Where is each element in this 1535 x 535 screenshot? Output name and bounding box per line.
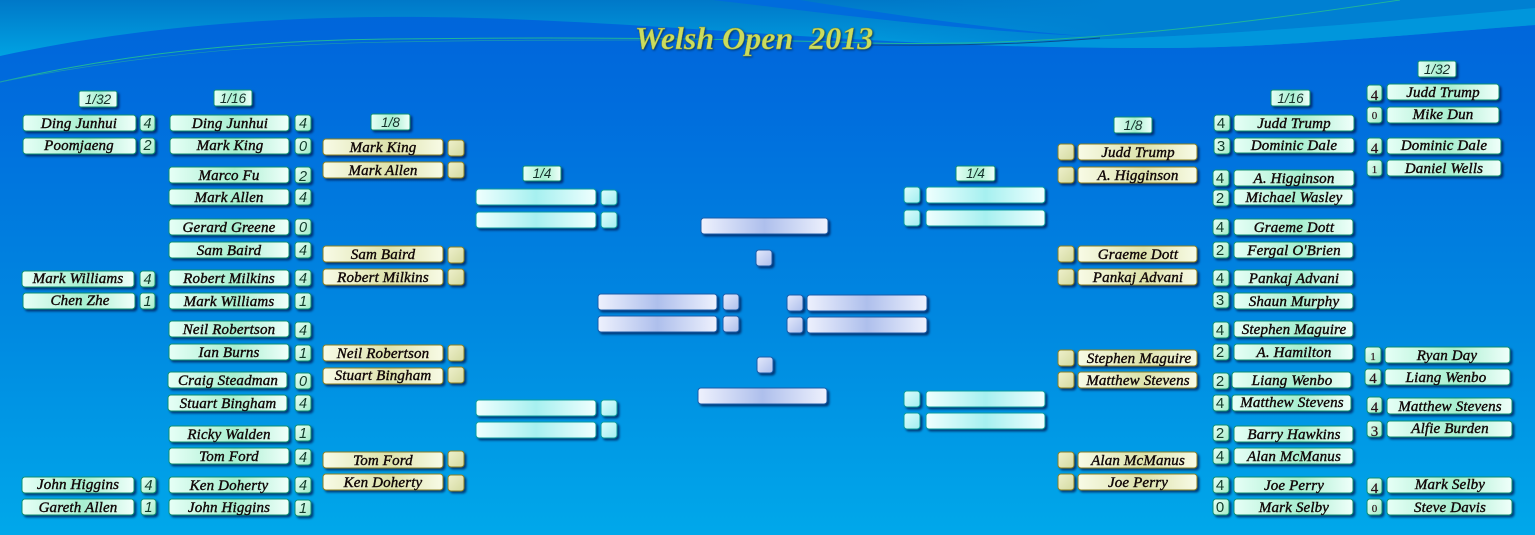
player: Matthew Stevens: 4	[1216, 395, 1224, 412]
player: Liang Wenbo	[1365, 369, 1510, 387]
round label 1/4: 1/4	[533, 166, 551, 181]
player: Matthew Stevens	[1367, 397, 1512, 416]
player: A. Hamilton	[1213, 344, 1353, 361]
round: right 1/4	[904, 166, 1045, 429]
player: Daniel Wells: Daniel Wells	[1404, 161, 1483, 177]
player: Fergal O'Brien: Fergal O'Brien	[1246, 243, 1341, 259]
player: Ian Burns: 1	[299, 346, 307, 362]
player: Shaun Murphy	[1213, 292, 1353, 310]
player: John Higgins: John Higgins	[188, 500, 270, 516]
player: Poomjaeng: 2	[142, 138, 152, 154]
round label 1/4	[523, 166, 561, 181]
player: Marco Fu: 2	[298, 169, 307, 185]
player: Steve Davis: Steve Davis	[1414, 500, 1486, 516]
player: John Higgins: 1	[299, 501, 307, 517]
player: Pankaj Advani	[1058, 269, 1197, 286]
player: Stephen Maguire	[1213, 321, 1353, 339]
player: Neil Robertson	[169, 321, 311, 339]
player: Gareth Allen: 1	[144, 500, 153, 516]
round label 1/32	[79, 91, 117, 107]
player: Ian Burns	[169, 344, 311, 362]
player: Graeme Dott: 4	[1216, 219, 1224, 236]
player: Mark King: Mark King	[349, 140, 417, 156]
player: Robert Milkins: Robert Milkins	[336, 270, 429, 286]
player: Judd Trump	[1214, 115, 1354, 132]
player: Robert Milkins	[169, 270, 311, 287]
player: Mark Allen	[323, 162, 464, 179]
player: Judd Trump: Judd Trump	[1101, 145, 1175, 161]
player: Steve Davis	[1367, 499, 1512, 516]
player: Daniel Wells: 1	[1372, 164, 1377, 176]
player: Sam Baird: 4	[299, 243, 307, 259]
round: right 1/16	[1213, 90, 1354, 516]
player: Barry Hawkins: 2	[1216, 425, 1224, 442]
centre: finals	[598, 218, 927, 404]
player: Mark Williams: 4	[143, 272, 152, 288]
player: Craig Steadman: 0	[299, 374, 307, 390]
player: Mark Allen	[169, 189, 311, 206]
player: Neil Robertson: Neil Robertson	[182, 322, 275, 338]
player: Steve Davis: 0	[1372, 503, 1378, 515]
player: Graeme Dott	[1213, 219, 1353, 236]
player: Ding Junhui: 4	[299, 116, 307, 132]
player: Joe Perry: Joe Perry	[1108, 475, 1168, 491]
empty slot	[904, 391, 1045, 407]
player: Judd Trump: Judd Trump	[1406, 85, 1480, 101]
round label 1/16: 1/16	[1277, 91, 1304, 106]
round: left 1/16	[168, 90, 311, 517]
player: Stuart Bingham	[168, 395, 311, 412]
player: Judd Trump: 4	[1371, 88, 1379, 104]
player: Stephen Maguire: Stephen Maguire	[1087, 351, 1191, 367]
player: Sam Baird	[323, 246, 464, 263]
round label 1/4: 1/4	[966, 166, 985, 181]
player: Ryan Day: Ryan Day	[1416, 348, 1477, 364]
player: Michael Wasley: 2	[1216, 190, 1224, 207]
player: Mark King: 0	[299, 139, 307, 155]
player: Gerard Greene	[169, 219, 311, 236]
player: Ricky Walden: Ricky Walden	[186, 427, 271, 443]
player: Pankaj Advani: Pankaj Advani	[1248, 271, 1339, 287]
player: Joe Perry: 4	[1216, 477, 1224, 494]
player: Mike Dun: 0	[1372, 110, 1378, 122]
player: Mark Selby: Mark Selby	[1414, 477, 1485, 493]
player: Stuart Bingham: Stuart Bingham	[180, 396, 276, 412]
player: John Higgins	[22, 477, 156, 494]
player: Dominic Dale	[1367, 138, 1501, 157]
player: Stuart Bingham	[323, 367, 464, 384]
player: Craig Steadman	[168, 372, 311, 390]
player: Judd Trump: Judd Trump	[1257, 116, 1331, 132]
player: Joe Perry: Joe Perry	[1264, 478, 1324, 494]
player: Shaun Murphy: 3	[1216, 292, 1224, 309]
player: Ding Junhui: 4	[143, 116, 152, 132]
round label 1/8: 1/8	[1124, 118, 1143, 133]
player: Dominic Dale	[1214, 138, 1354, 155]
player: Chen Zhe	[23, 293, 155, 310]
player: A. Higginson: 4	[1216, 170, 1224, 187]
player: Matthew Stevens: 4	[1371, 400, 1379, 416]
player: Craig Steadman: Craig Steadman	[178, 373, 278, 389]
player: John Higgins: John Higgins	[37, 477, 119, 493]
player: Alfie Burden	[1367, 421, 1512, 440]
player: Alfie Burden: Alfie Burden	[1410, 421, 1489, 437]
player: A. Higginson: A. Higginson	[1253, 171, 1334, 187]
player: Mark Allen: Mark Allen	[193, 190, 264, 206]
player: Ken Doherty: 4	[299, 478, 307, 494]
player: Mark King	[323, 139, 464, 156]
player: Poomjaeng: Poomjaeng	[43, 138, 114, 154]
player: John Higgins	[169, 499, 311, 517]
player: Neil Robertson: 4	[299, 323, 307, 339]
player: Ding Junhui: Ding Junhui	[191, 116, 268, 132]
player: Ding Junhui	[23, 115, 155, 132]
player: Ding Junhui	[170, 115, 311, 132]
round label 1/16	[1271, 90, 1310, 106]
player: Judd Trump	[1058, 144, 1197, 161]
player: Mark Williams	[169, 293, 311, 310]
player: Robert Milkins	[323, 269, 464, 286]
player: Chen Zhe: 1	[143, 294, 152, 310]
player: Ricky Walden	[169, 425, 311, 443]
final slot bottom	[698, 357, 827, 404]
final slot top	[701, 218, 828, 266]
player: Mark Selby	[1367, 477, 1512, 497]
empty slot	[476, 189, 617, 205]
player: Liang Wenbo: 4	[1369, 371, 1377, 387]
player: Mark King: Mark King	[196, 138, 264, 154]
empty slot	[476, 212, 617, 228]
round label 1/4	[956, 166, 995, 181]
player: Ken Doherty: Ken Doherty	[343, 475, 423, 491]
player: Robert Milkins: 4	[299, 271, 307, 287]
player: Judd Trump	[1367, 84, 1499, 104]
player: Graeme Dott	[1058, 246, 1197, 263]
player: Mike Dun	[1367, 107, 1499, 123]
player: Dominic Dale: Dominic Dale	[1250, 138, 1337, 154]
round label 1/32	[1418, 61, 1456, 77]
player: Robert Milkins: Robert Milkins	[182, 271, 275, 287]
round label 1/8: 1/8	[381, 115, 400, 130]
player: Alan McManus	[1213, 448, 1353, 465]
empty slot	[904, 210, 1045, 226]
player: Gerard Greene: Gerard Greene	[183, 220, 276, 236]
player: Ken Doherty	[323, 474, 464, 491]
round label 1/32: 1/32	[85, 92, 112, 107]
player: Alan McManus: 4	[1216, 448, 1224, 465]
player: Ken Doherty: Ken Doherty	[189, 478, 269, 494]
semi-final left slot	[598, 294, 739, 310]
player: Matthew Stevens: Matthew Stevens	[1085, 373, 1190, 389]
player: Ian Burns: Ian Burns	[198, 345, 259, 361]
player: A. Higginson	[1058, 167, 1197, 184]
player: Alfie Burden: 3	[1371, 424, 1378, 440]
title: Welsh Open 2013	[635, 20, 873, 56]
player: Chen Zhe: Chen Zhe	[50, 293, 110, 309]
player: Neil Robertson	[323, 345, 464, 362]
player: Ryan Day: 1	[1370, 351, 1376, 363]
player: Alan McManus: Alan McManus	[1246, 449, 1341, 465]
player: Dominic Dale: Dominic Dale	[1400, 138, 1487, 154]
player: Pankaj Advani	[1213, 270, 1353, 287]
player: Pankaj Advani: 4	[1216, 270, 1224, 287]
player: Fergal O'Brien	[1213, 242, 1353, 259]
player: Mark Selby: Mark Selby	[1258, 500, 1329, 516]
player: Barry Hawkins: Barry Hawkins	[1247, 427, 1341, 443]
player: Stuart Bingham: Stuart Bingham	[335, 368, 431, 384]
round label 1/16	[214, 90, 252, 106]
player: Gareth Allen: Gareth Allen	[39, 500, 117, 516]
player: Alan McManus	[1058, 452, 1197, 469]
player: Michael Wasley: Michael Wasley	[1245, 190, 1343, 206]
player: Poomjaeng	[23, 138, 155, 154]
round: left 1/4	[476, 166, 617, 438]
round: left 1/32	[22, 91, 156, 516]
player: Tom Ford	[169, 448, 311, 466]
player: Graeme Dott: Graeme Dott	[1254, 220, 1335, 236]
player: Shaun Murphy: Shaun Murphy	[1249, 294, 1339, 310]
round label 1/8	[371, 114, 410, 130]
player: Graeme Dott: Graeme Dott	[1098, 247, 1179, 263]
player: Tom Ford	[323, 451, 464, 469]
semi-final right slot	[787, 295, 927, 311]
player: A. Higginson	[1213, 170, 1354, 187]
player: Stuart Bingham: 4	[299, 396, 307, 412]
semi-final left slot	[598, 316, 739, 332]
player: Mark Selby	[1213, 499, 1353, 516]
player: Joe Perry	[1213, 477, 1353, 494]
player: Mike Dun: Mike Dun	[1412, 107, 1473, 123]
player: Marco Fu	[169, 167, 311, 185]
round: left 1/8	[323, 114, 464, 491]
round: right 1/32	[1365, 61, 1512, 516]
player: Matthew Stevens: Matthew Stevens	[1239, 395, 1344, 411]
player: Gareth Allen	[22, 499, 156, 516]
player: A. Hamilton: A. Hamilton	[1256, 345, 1331, 361]
empty slot	[904, 413, 1045, 429]
round label 1/8	[1114, 117, 1152, 133]
player: Daniel Wells	[1367, 160, 1501, 177]
player: Judd Trump: 4	[1217, 115, 1225, 132]
empty slot	[476, 422, 617, 438]
player: Pankaj Advani: Pankaj Advani	[1092, 270, 1183, 286]
player: Alan McManus: Alan McManus	[1090, 453, 1185, 469]
player: Mark Selby: 0	[1216, 499, 1224, 516]
empty slot	[904, 187, 1045, 203]
round label 1/32: 1/32	[1424, 62, 1451, 77]
player: Fergal O'Brien: 2	[1216, 242, 1224, 259]
player: Stephen Maguire: 4	[1216, 322, 1224, 339]
semi-final right slot	[787, 317, 927, 333]
player: Ryan Day	[1365, 347, 1510, 364]
player: Tom Ford: Tom Ford	[353, 453, 413, 469]
player: Tom Ford: Tom Ford	[199, 449, 259, 465]
player: Neil Robertson: Neil Robertson	[336, 346, 429, 362]
player: Mark Allen: Mark Allen	[347, 163, 418, 179]
round label 1/16: 1/16	[220, 91, 247, 106]
player: Mark Williams: Mark Williams	[183, 294, 274, 310]
player: Dominic Dale: 3	[1217, 138, 1225, 155]
player: Sam Baird: Sam Baird	[351, 247, 416, 263]
player: Marco Fu: Marco Fu	[197, 168, 260, 184]
player: Michael Wasley	[1213, 189, 1353, 207]
player: Mark Williams	[22, 271, 155, 288]
player: Mark King	[170, 138, 311, 155]
player: Gerard Greene: 0	[299, 220, 307, 236]
round: right 1/8	[1058, 117, 1197, 491]
player: Liang Wenbo	[1213, 372, 1351, 390]
player: Mark Williams: 1	[299, 294, 307, 310]
player: Mark Selby: 4	[1371, 481, 1379, 497]
player: Ken Doherty	[169, 477, 311, 494]
player: Mark Allen: 4	[299, 190, 307, 206]
player: Mark Williams: Mark Williams	[32, 271, 123, 287]
player: Sam Baird: Sam Baird	[197, 243, 262, 259]
player: Matthew Stevens: Matthew Stevens	[1397, 399, 1502, 415]
player: Joe Perry	[1058, 474, 1197, 491]
player: Liang Wenbo: Liang Wenbo	[1251, 373, 1333, 389]
player: A. Higginson: A. Higginson	[1097, 168, 1178, 184]
player: Tom Ford: 4	[299, 450, 307, 466]
player: Ricky Walden: 1	[299, 426, 307, 442]
player: Barry Hawkins	[1213, 425, 1353, 443]
empty slot	[476, 400, 617, 416]
player: Dominic Dale: 4	[1371, 141, 1379, 157]
player: Ding Junhui: Ding Junhui	[40, 116, 117, 132]
player: John Higgins: 4	[144, 478, 153, 494]
player: Liang Wenbo: 2	[1216, 373, 1224, 390]
player: Liang Wenbo: Liang Wenbo	[1405, 370, 1487, 386]
player: Stephen Maguire: Stephen Maguire	[1242, 322, 1346, 338]
player: A. Hamilton: 2	[1216, 344, 1224, 361]
player: Sam Baird	[169, 242, 311, 259]
